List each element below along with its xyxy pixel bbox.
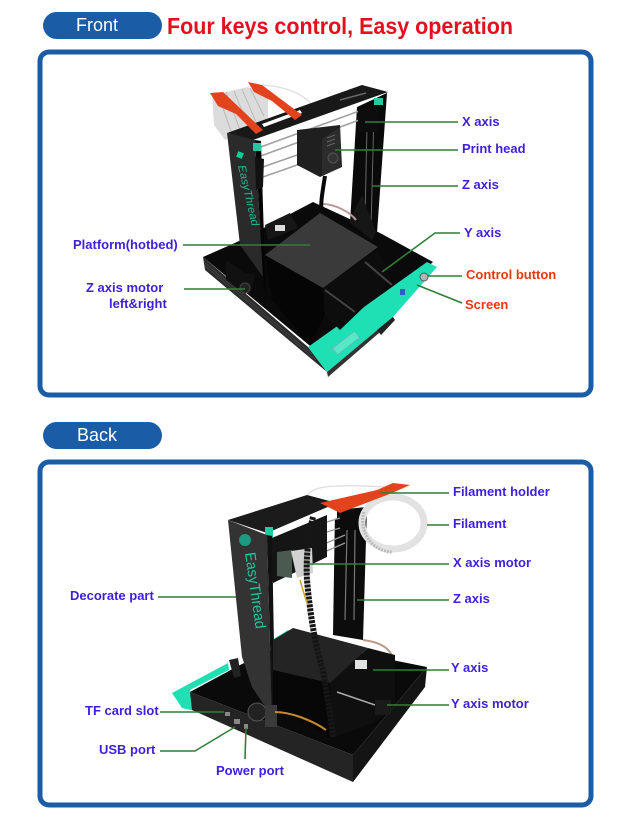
panel: back xyxy=(40,462,591,805)
labels: front: Screen xyxy=(465,297,508,312)
guide rods xyxy=(258,110,362,178)
labels: back: Y axis motor xyxy=(451,696,529,711)
left pillar xyxy=(227,133,266,304)
title: Four keys control, Easy operation xyxy=(167,13,513,39)
badge: Back: Back xyxy=(77,425,118,445)
base xyxy=(190,640,427,782)
y carriage xyxy=(273,648,395,738)
labels: back: Z axis xyxy=(453,591,490,606)
labels: front: Z axis xyxy=(462,177,499,192)
rear fan xyxy=(248,703,326,730)
labels: back: X axis motor xyxy=(453,555,531,570)
labels: back: USB port xyxy=(99,742,156,757)
badge: Front: Front xyxy=(76,15,118,35)
ports xyxy=(225,712,248,729)
labels: front: Z axis motor xyxy=(86,280,163,295)
platform xyxy=(273,628,368,683)
labels: front: Print head xyxy=(462,141,526,156)
labels: front: Control button xyxy=(466,267,556,282)
x axis motor xyxy=(358,108,378,132)
labels: back: Filament xyxy=(453,516,507,531)
badge: Back xyxy=(43,422,162,449)
teal strip far end xyxy=(272,630,292,643)
printer illustration: front view xyxy=(203,82,437,377)
decorate pillar xyxy=(228,520,275,717)
callout lines: back xyxy=(158,493,449,759)
labels: back: Power port xyxy=(216,763,285,778)
printer illustration: back view xyxy=(172,483,427,782)
left pillar: EasyThread xyxy=(235,164,261,228)
base xyxy=(203,202,437,377)
top frame xyxy=(228,495,337,551)
teal front strip xyxy=(172,663,229,711)
labels: back: Y axis xyxy=(451,660,488,675)
labels: front: left&right xyxy=(109,296,167,311)
print head xyxy=(297,125,342,215)
filament spool xyxy=(212,85,316,140)
filament holder xyxy=(320,483,410,513)
labels: back xyxy=(70,484,550,778)
top frame xyxy=(227,85,388,140)
red filament holders xyxy=(210,82,302,134)
platform xyxy=(265,213,378,288)
rear pillar xyxy=(333,507,394,662)
labels: back: Filament holder xyxy=(453,484,550,499)
panel: front xyxy=(40,52,591,395)
y carriage xyxy=(265,213,392,345)
labels: back: Decorate part xyxy=(70,588,154,603)
labels: front: Y axis xyxy=(464,225,501,240)
filament coil xyxy=(308,486,424,552)
labels: back: TF card slot xyxy=(85,703,159,718)
labels: front: Platform(hotbed) xyxy=(73,237,178,252)
z axis motor xyxy=(226,260,255,295)
guide rods xyxy=(268,518,345,553)
motor wires xyxy=(300,580,308,605)
rear right pillar xyxy=(322,93,387,240)
filament cable chain xyxy=(307,517,333,737)
labels: front: X axis xyxy=(462,114,500,129)
decorate pillar: EasyThread xyxy=(241,551,269,630)
x axis motor xyxy=(277,548,313,578)
badge: Front xyxy=(43,12,162,39)
callout lines: front xyxy=(183,122,462,303)
labels: front xyxy=(73,114,556,312)
head back plate xyxy=(267,515,327,583)
control knob xyxy=(229,658,241,678)
carriage block xyxy=(355,660,367,669)
